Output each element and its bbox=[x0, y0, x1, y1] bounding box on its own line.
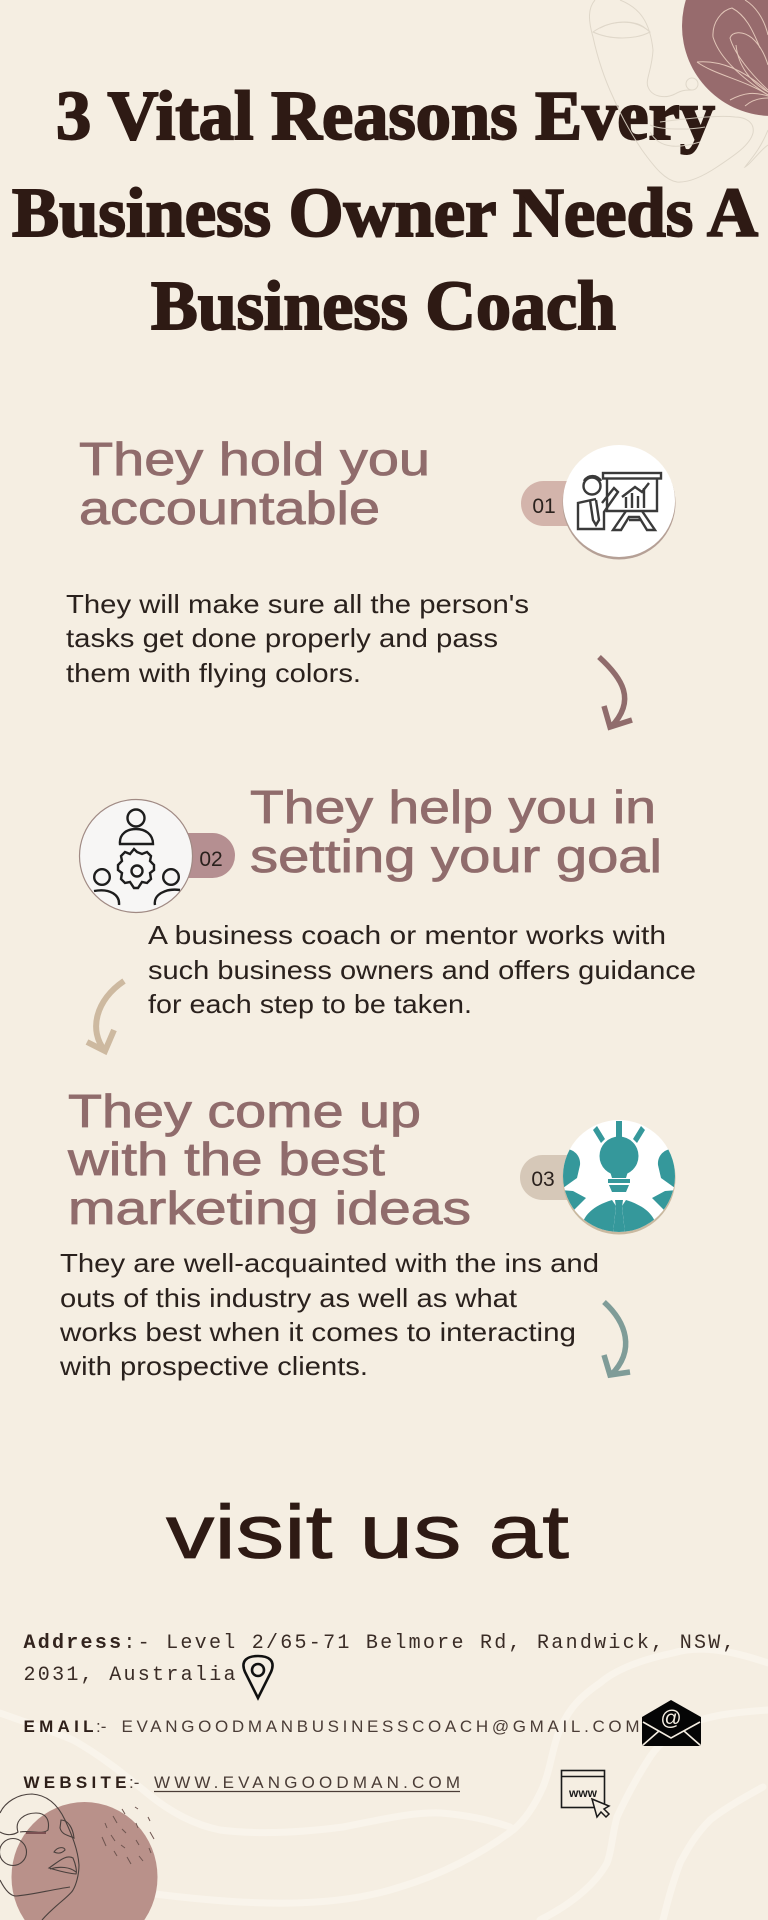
title: 3 Vital Reasons Every bbox=[56, 78, 715, 155]
icon: open envelope: @ bbox=[660, 1707, 682, 1730]
section 1 body text: tasks get done properly and pass bbox=[66, 623, 498, 653]
website: WWW.EVANGOODMAN.COM bbox=[154, 1773, 460, 1792]
section 2 heading: They help you in bbox=[250, 781, 656, 833]
section 3 body text: with prospective clients. bbox=[59, 1351, 368, 1381]
icon: browser window with cursor bbox=[562, 1770, 609, 1817]
section 3 body text bbox=[59, 1248, 599, 1381]
arrow 1 bbox=[599, 657, 632, 727]
title: Business Coach bbox=[151, 268, 616, 345]
address bbox=[24, 1632, 734, 1687]
icon: light bulb with people bbox=[562, 1120, 676, 1234]
icon: open envelope bbox=[642, 1700, 701, 1746]
number badge 02: 02 bbox=[199, 848, 223, 871]
email: EMAIL bbox=[24, 1717, 94, 1736]
section 1 body text: They will make sure all the person's bbox=[66, 589, 529, 619]
section 3 body text: works best when it comes to interacting bbox=[59, 1317, 576, 1347]
arrow 2 bbox=[87, 981, 124, 1051]
number badge 02 bbox=[150, 833, 235, 878]
section 2 body text: A business coach or mentor works with bbox=[148, 920, 666, 950]
email: EVANGOODMANBUSINESSCOACH@GMAIL.COM bbox=[122, 1717, 640, 1736]
section 1 body text: them with flying colors. bbox=[66, 658, 361, 688]
visit us heading: visit us at bbox=[166, 1490, 569, 1575]
decorative circle top right with flower bbox=[682, 0, 768, 116]
section 3 heading: with the best bbox=[67, 1133, 385, 1185]
section 2 body text: such business owners and offers guidance bbox=[148, 955, 696, 985]
website: WEBSITE bbox=[24, 1773, 126, 1792]
section 1 heading bbox=[79, 433, 430, 534]
number badge 01 bbox=[521, 481, 611, 526]
address: 2031, Australia bbox=[24, 1664, 236, 1687]
icon: location pin bbox=[243, 1656, 273, 1698]
number badge 03: 03 bbox=[531, 1168, 555, 1191]
section 2 body text: for each step to be taken. bbox=[148, 989, 472, 1019]
section 3 body text: outs of this industry as well as what bbox=[60, 1283, 518, 1313]
section 1 heading: They hold you bbox=[79, 433, 430, 485]
icon: team around gear bbox=[80, 800, 192, 912]
section 3 heading bbox=[67, 1085, 471, 1234]
decorative circle bottom left with line art face bbox=[0, 1794, 158, 1920]
line art face top right bbox=[589, 0, 768, 182]
section 1 body text bbox=[66, 589, 529, 688]
icon: browser window with cursor: www bbox=[568, 1786, 598, 1800]
title: Business Owner Needs A bbox=[12, 175, 758, 252]
section 3 heading: marketing ideas bbox=[68, 1182, 471, 1234]
arrow 3 bbox=[604, 1302, 630, 1375]
email: :- bbox=[96, 1717, 106, 1736]
title bbox=[12, 78, 758, 345]
section 1 heading: accountable bbox=[79, 482, 380, 534]
section 2 heading bbox=[250, 781, 662, 882]
section 2 body text bbox=[148, 920, 696, 1019]
number badge 03 bbox=[520, 1155, 610, 1200]
section 3 heading: They come up bbox=[68, 1085, 421, 1137]
icon: presenter with chart bbox=[562, 445, 676, 560]
section 3 body text: They are well-acquainted with the ins and bbox=[60, 1248, 599, 1278]
website: :- bbox=[129, 1773, 139, 1792]
address: Address:- Level 2/65-71 Belmore Rd, Randwick, NSW, bbox=[24, 1632, 734, 1655]
number badge 01: 01 bbox=[532, 495, 556, 518]
section 2 heading: setting your goal bbox=[250, 830, 662, 882]
